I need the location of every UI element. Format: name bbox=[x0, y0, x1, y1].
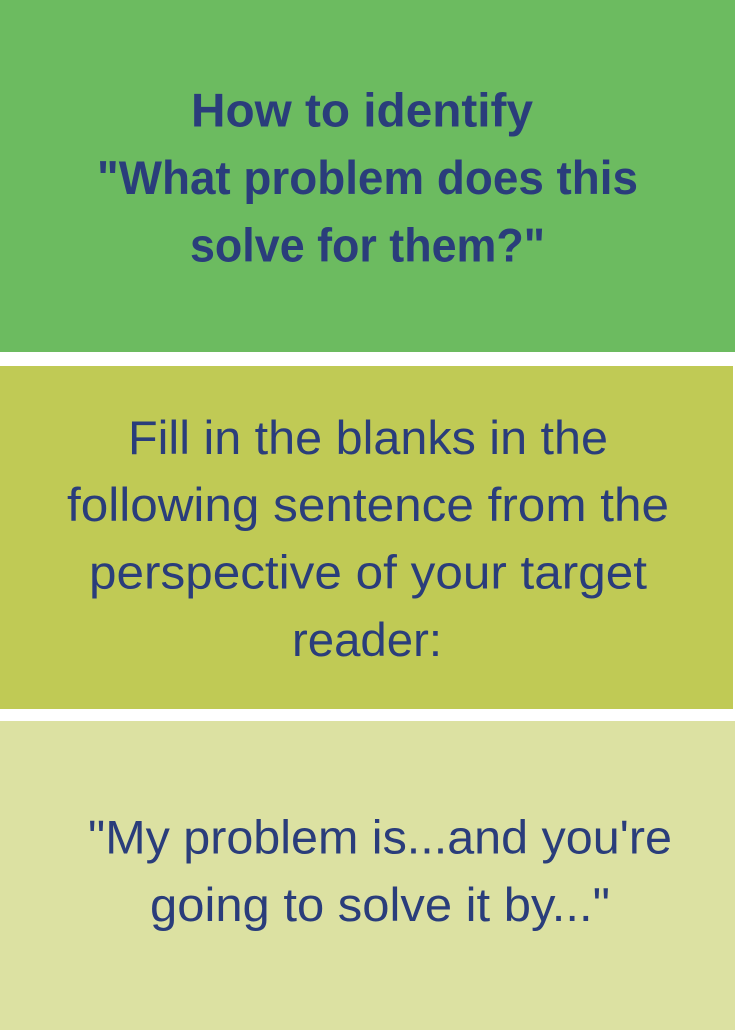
heading: title text bbox=[97, 84, 638, 272]
heading: title text: "What problem does this bbox=[97, 151, 638, 204]
text block: instruction: following sentence from the bbox=[67, 478, 669, 531]
panel: instruction bbox=[0, 366, 733, 709]
text block: instruction: Fill in the blanks in the bbox=[128, 411, 608, 464]
panel: title bbox=[0, 0, 735, 352]
text block: instruction: reader: bbox=[292, 613, 442, 666]
heading: title text: How to identify bbox=[191, 84, 533, 137]
text block: instruction: perspective of your target bbox=[89, 546, 647, 598]
text block: instruction bbox=[67, 411, 669, 666]
text block: sentence template: going to solve it by..." bbox=[150, 878, 610, 931]
heading: title text: solve for them?" bbox=[190, 219, 545, 272]
text block: sentence template bbox=[88, 810, 672, 931]
panel: sentence template bbox=[0, 721, 735, 1030]
text block: sentence template: "My problem is...and you're bbox=[88, 810, 672, 864]
